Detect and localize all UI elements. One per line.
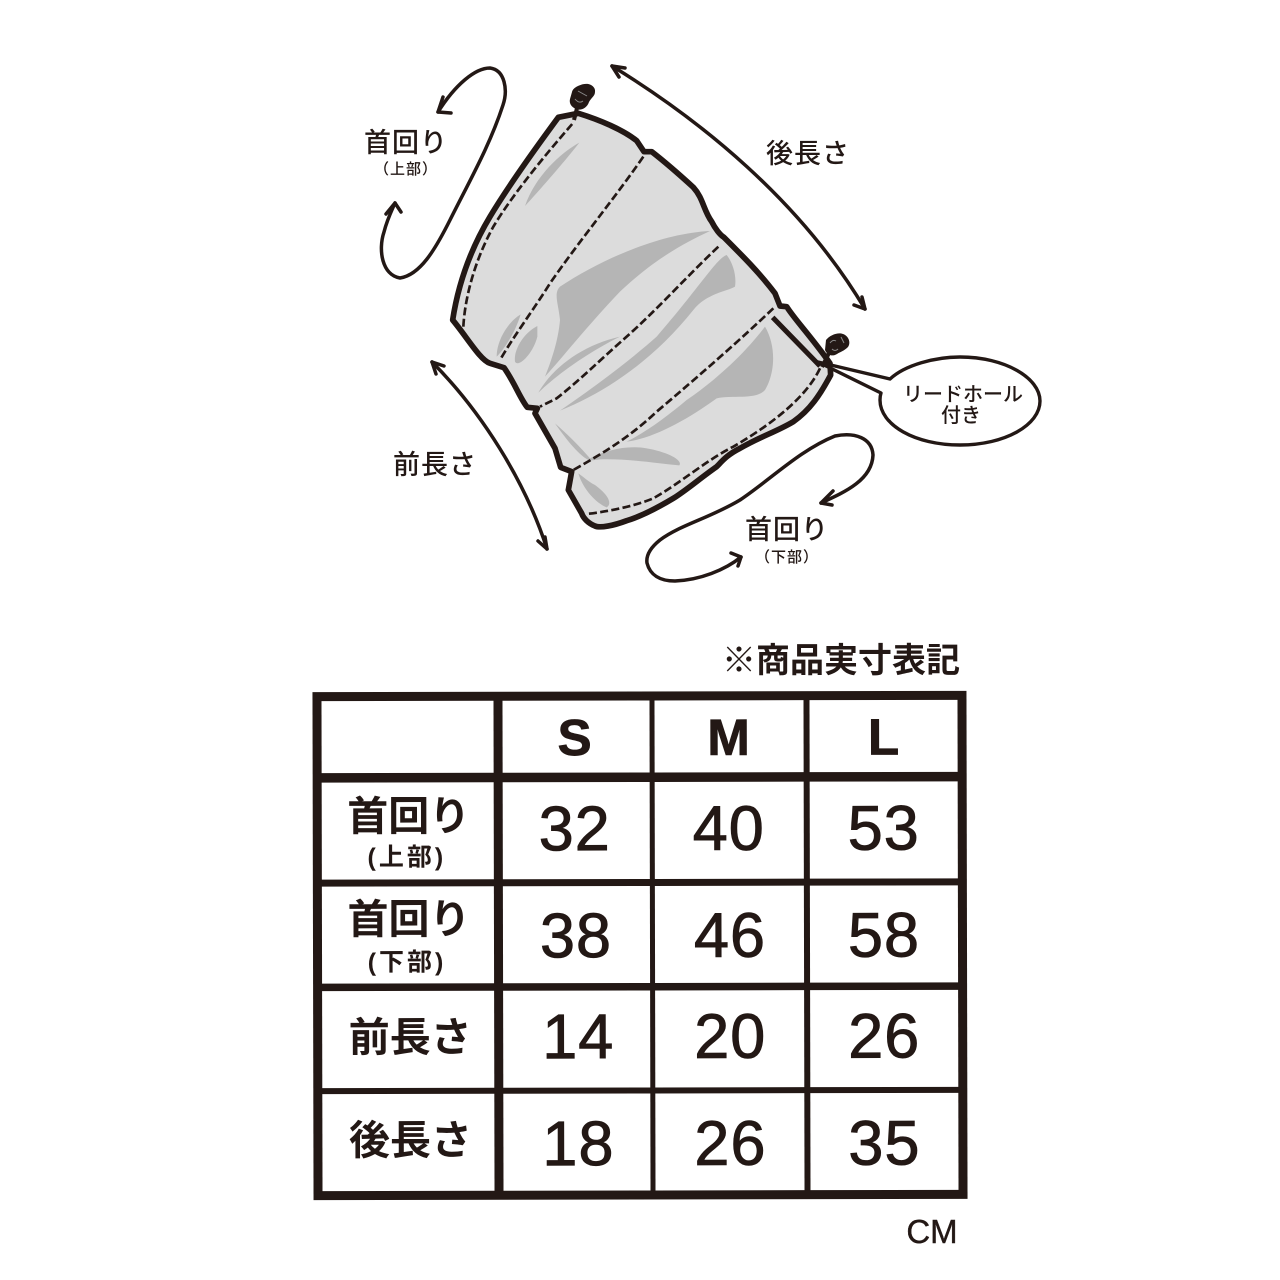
cord stopper bottom [822,333,849,367]
row: front length: 前長さ [349,1014,472,1061]
row: neck bottom: 58 [848,900,920,971]
label: front length: 前長さ [393,450,477,480]
row: back length: 26 [694,1109,767,1179]
arrow: neck bottom [647,435,873,581]
row: neck top: 32 [539,794,611,864]
row: neck top: 首回り [347,793,470,840]
stitch lines [463,123,820,514]
row: neck bottom: (下部) [368,948,446,977]
product diagram: neck gaiter [453,113,831,527]
row: back length: 後長さ [349,1117,472,1164]
header row: M [707,709,750,766]
arrow: front length [432,362,547,549]
table grid [312,691,968,1200]
size table [312,691,968,1200]
header row [557,708,899,766]
label: neck top: 首回り [364,128,448,158]
row: neck top: 40 [693,794,765,864]
label: neck bottom [745,515,829,567]
row: front length [349,1001,920,1073]
arrow: neck top [381,68,505,278]
label: neck bottom: 首回り [745,515,829,545]
arrow: back length [612,66,865,309]
note: actual measurements: ※商品実寸表記 [722,642,960,680]
row: front length: 26 [848,1001,920,1072]
label: neck bottom: （下部） [755,546,819,567]
row: neck bottom [347,895,920,977]
callout: lead hole: 付き [941,404,981,427]
callout: lead hole [818,357,1040,445]
cord stopper top [570,84,595,120]
row: back length: 18 [542,1109,615,1179]
header row: S [557,709,592,766]
lead hole slit [773,317,820,366]
folds and shading [497,143,773,507]
row: neck top [347,792,920,872]
label: neck top: （上部） [374,158,438,179]
row: neck bottom: 首回り [347,896,470,943]
row: front length: 14 [542,1002,614,1072]
row: neck bottom: 46 [694,901,766,971]
row: front length: 20 [694,1002,766,1072]
header row: L [868,708,899,766]
row: back length [349,1108,921,1180]
row: neck bottom: 38 [540,901,612,971]
unit label: CM [906,1213,958,1250]
callout: lead hole: リードホール [903,384,1023,406]
row: neck top: 53 [848,793,920,864]
mask body outline [453,113,831,527]
row: back length: 35 [848,1108,921,1179]
label: neck top [364,128,448,179]
label: back length: 後長さ [766,139,850,169]
row: neck top: (上部) [367,843,446,872]
